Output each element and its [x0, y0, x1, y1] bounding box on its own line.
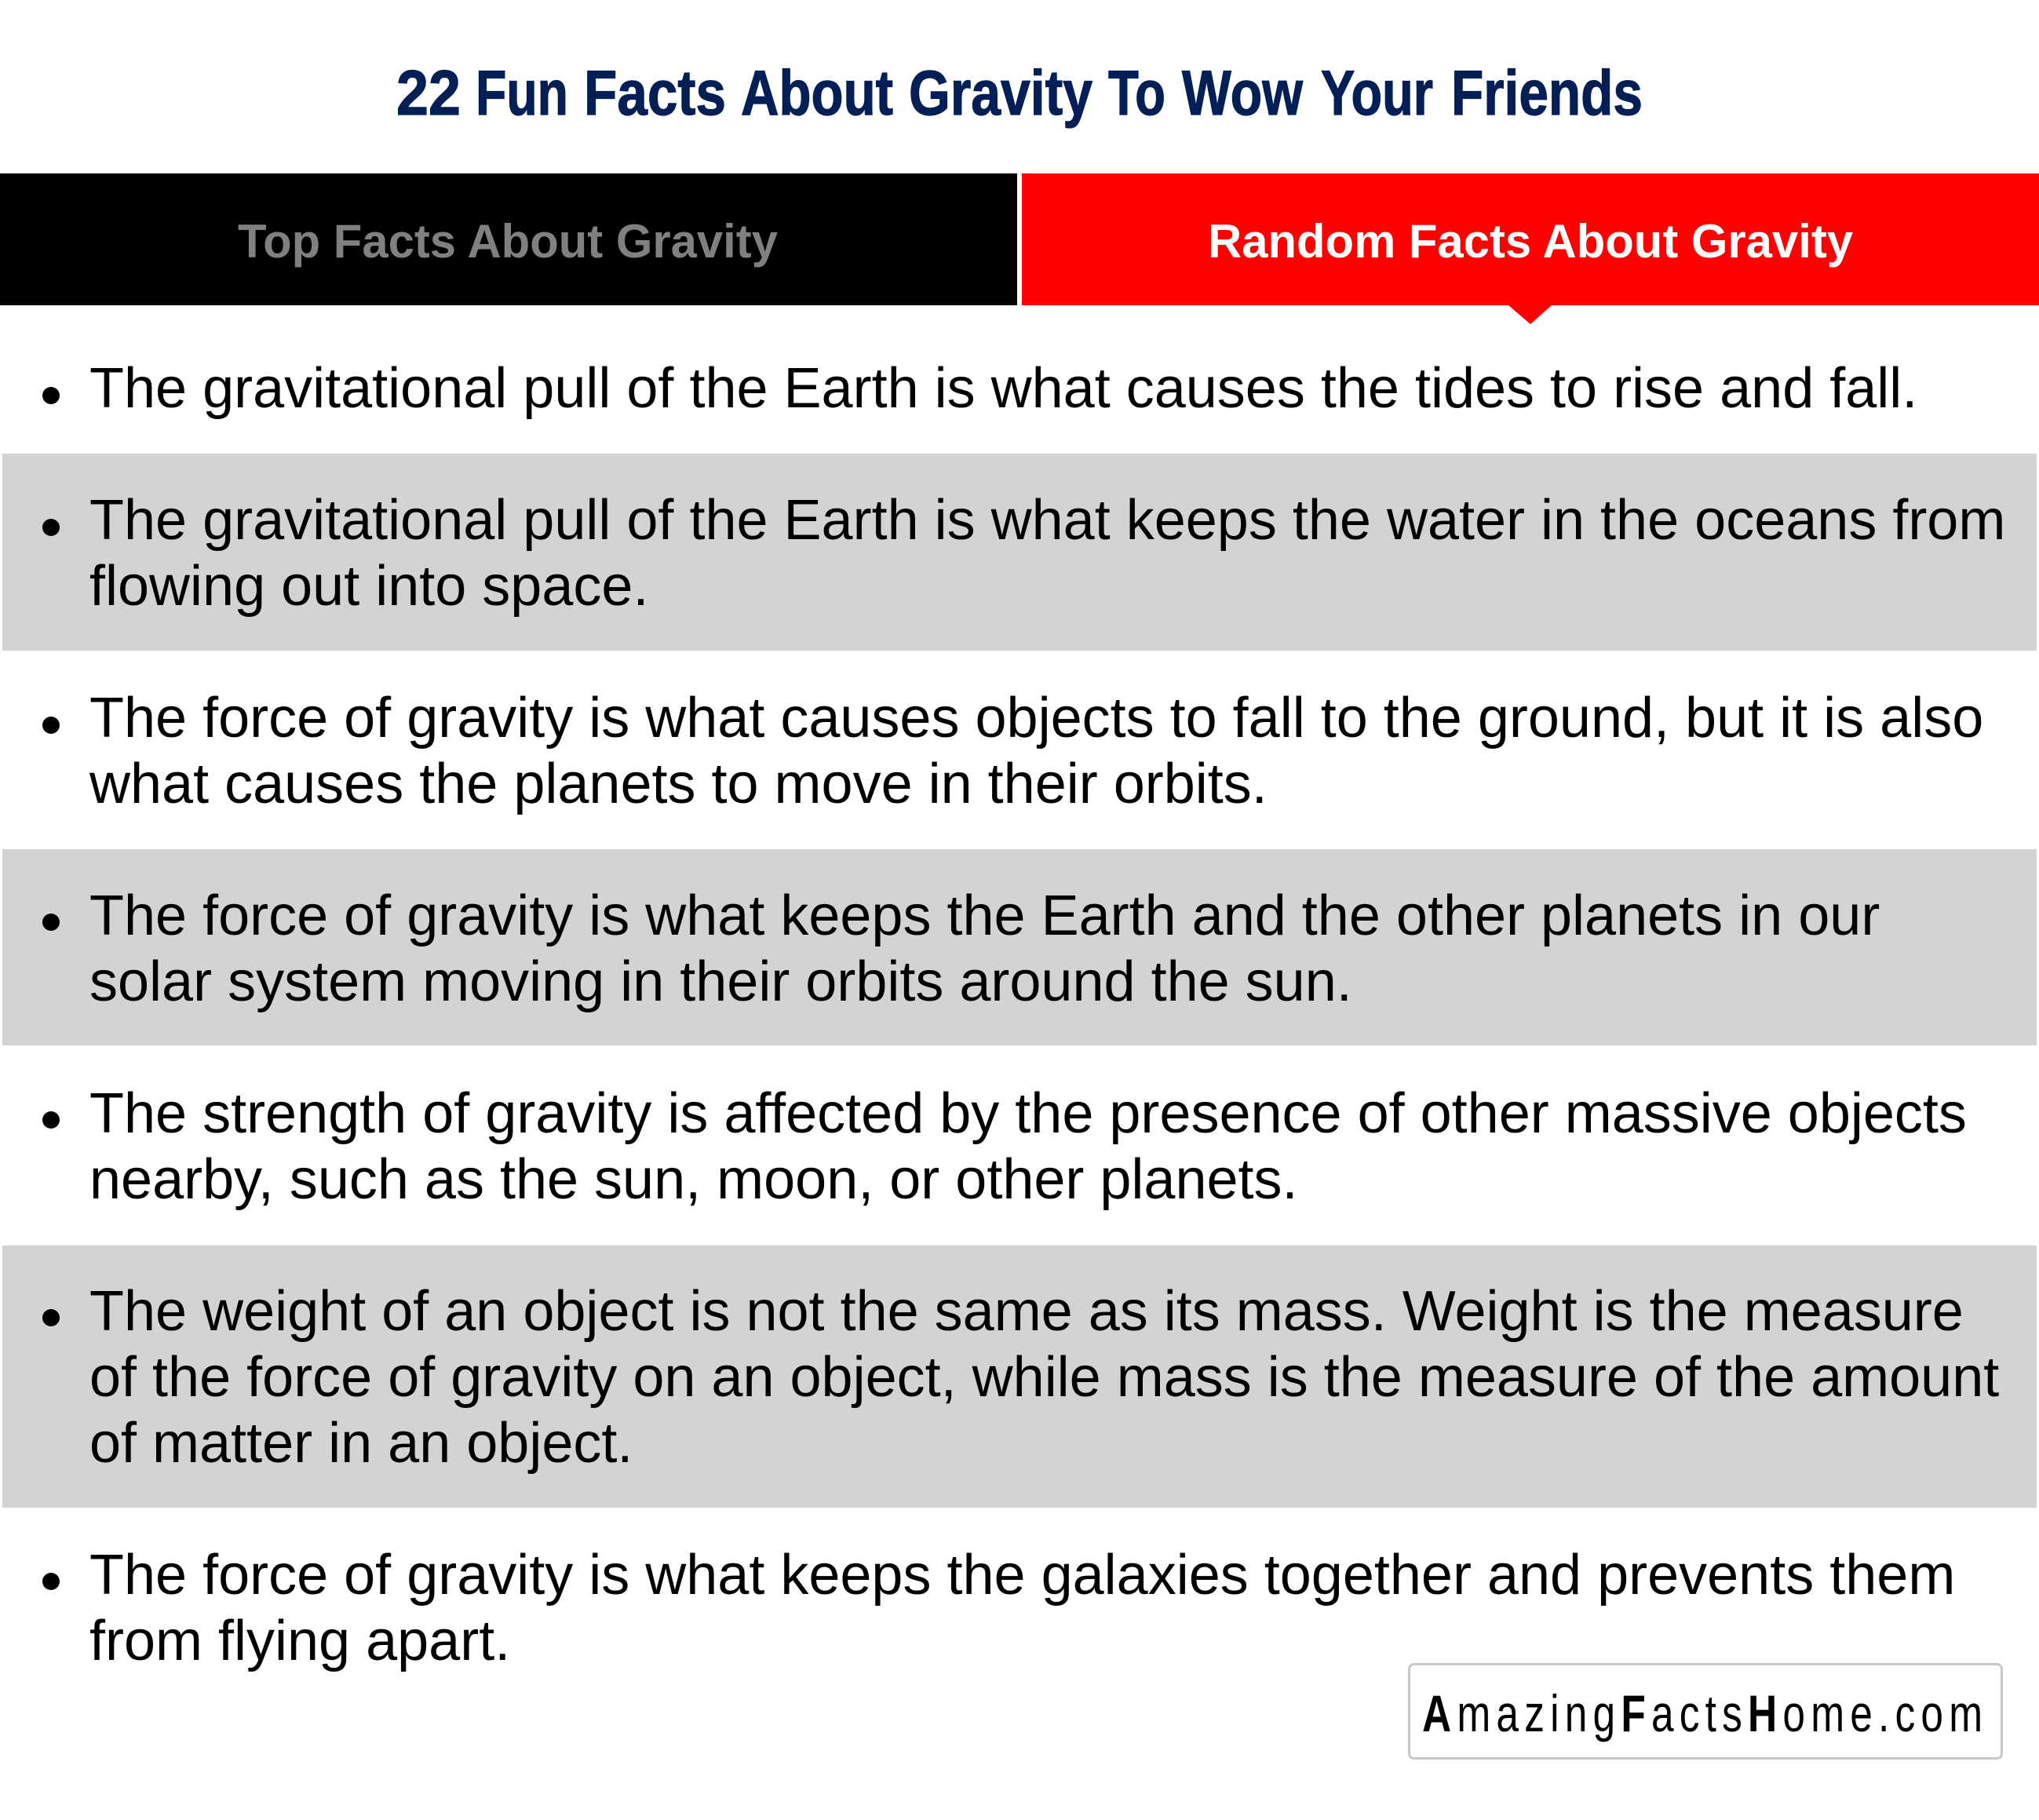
fact 5: nearby, such as the sun, moon, or other planets. — [89, 1148, 1298, 1211]
title: About — [741, 58, 893, 129]
fact 3 — [42, 687, 1983, 815]
fact 6: of the force of gravity on an object, while mass is the measure of the amount — [89, 1346, 1999, 1409]
title: Friends — [1451, 58, 1643, 129]
fact 7: from flying apart. — [89, 1610, 510, 1672]
fact 6: The weight of an object is not the same as its mass. Weight is the measure — [89, 1280, 1964, 1343]
fact 7 — [42, 1544, 1955, 1672]
title: To — [1108, 58, 1165, 129]
fact 4 — [2, 849, 2037, 1045]
title: 22 — [396, 58, 461, 129]
fact 4: solar system moving in their orbits around the sun. — [89, 950, 1352, 1013]
logo: AmazingFactsHome.com: AmazingFactsHome.com — [1422, 1684, 1988, 1742]
fact 6 — [2, 1246, 2037, 1508]
title: Your — [1321, 58, 1433, 129]
title: Facts — [584, 58, 726, 129]
title: Gravity — [909, 58, 1092, 129]
fact 3: The force of gravity is what causes objects to fall to the ground, but it is also — [89, 687, 1983, 750]
fact 2: flowing out into space. — [89, 555, 648, 618]
fact 5: The strength of gravity is affected by the presence of other massive objects — [89, 1082, 1967, 1145]
fact 2 — [2, 454, 2037, 651]
fact 3: what causes the planets to move in their orbits. — [89, 753, 1268, 815]
fact 2: The gravitational pull of the Earth is what keeps the water in the oceans from — [89, 489, 2005, 552]
tab: top facts — [0, 173, 1017, 305]
fact 6: of matter in an object. — [89, 1412, 633, 1475]
title: Fun — [476, 58, 568, 129]
tab: random facts — [1022, 173, 2039, 324]
fact 5 — [42, 1082, 1967, 1211]
title: Wow — [1182, 58, 1304, 129]
fact 1: The gravitational pull of the Earth is what causes the tides to rise and fall. — [89, 357, 1917, 420]
logo: AmazingFactsHome.com — [1410, 1664, 2001, 1758]
fact 4: The force of gravity is what keeps the Earth and the other planets in our — [89, 884, 1880, 947]
tab: top facts: Top Facts About Gravity — [238, 215, 779, 268]
fact 7: The force of gravity is what keeps the galaxies together and prevents them — [89, 1544, 1955, 1607]
tab: random facts: Random Facts About Gravity — [1208, 215, 1854, 268]
